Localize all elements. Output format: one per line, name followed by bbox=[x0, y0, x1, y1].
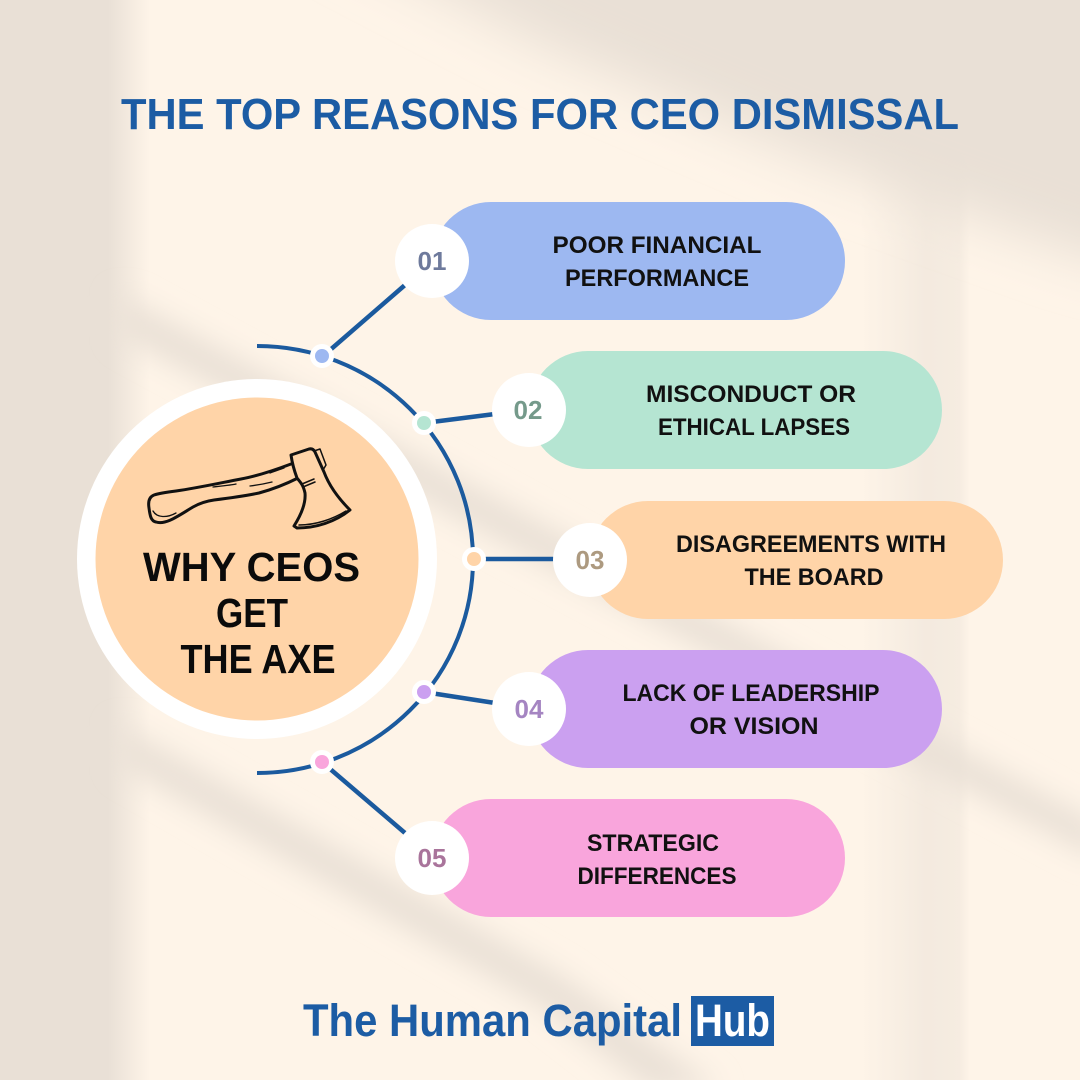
item 02: misconduct or ethical lapses bbox=[492, 351, 942, 469]
item 02: misconduct or ethical lapses: MISCONDUCT OR bbox=[646, 381, 856, 408]
item 04: lack of leadership or vision: LACK OF LEADERSHIP bbox=[622, 680, 880, 707]
item 03: disagreements with the board: THE BOARD bbox=[744, 564, 884, 591]
item 05: strategic differences: STRATEGIC bbox=[587, 830, 719, 857]
item 04: lack of leadership or vision: 04 bbox=[515, 694, 544, 724]
item 01: poor financial performance: 01 bbox=[418, 246, 446, 276]
central circle: why CEOs get the axe: THE AXE bbox=[180, 636, 336, 682]
central circle: why CEOs get the axe bbox=[77, 379, 437, 739]
item 04: lack of leadership or vision: OR VISION bbox=[690, 713, 818, 740]
icon: axe bbox=[149, 449, 350, 528]
connector nodes bbox=[310, 344, 486, 774]
logo: The Human Capital Hub: The Human Capital bbox=[303, 995, 682, 1046]
connector lines bbox=[322, 285, 555, 833]
item 01: poor financial performance: POOR FINANCIAL bbox=[552, 232, 762, 259]
item 03: disagreements with the board bbox=[553, 501, 1003, 619]
item 03: disagreements with the board: 03 bbox=[576, 545, 604, 575]
item 01: poor financial performance: PERFORMANCE bbox=[565, 265, 749, 292]
title: THE TOP REASONS FOR CEO DISMISSAL bbox=[121, 90, 959, 139]
item 03: disagreements with the board: DISAGREEMENTS WITH bbox=[676, 531, 946, 558]
central circle: why CEOs get the axe: GET bbox=[216, 590, 288, 636]
item 05: strategic differences bbox=[395, 799, 845, 917]
item 02: misconduct or ethical lapses: 02 bbox=[514, 395, 542, 425]
item 01: poor financial performance bbox=[395, 202, 845, 320]
connector arc bbox=[257, 346, 473, 773]
item 02: misconduct or ethical lapses: ETHICAL LAPSES bbox=[658, 414, 850, 441]
logo: The Human Capital Hub: Hub bbox=[695, 995, 770, 1046]
item 05: strategic differences: 05 bbox=[418, 843, 446, 873]
item 04: lack of leadership or vision bbox=[492, 650, 942, 768]
center heading: WHY CEOS bbox=[143, 544, 360, 590]
item 05: strategic differences: DIFFERENCES bbox=[578, 863, 736, 890]
